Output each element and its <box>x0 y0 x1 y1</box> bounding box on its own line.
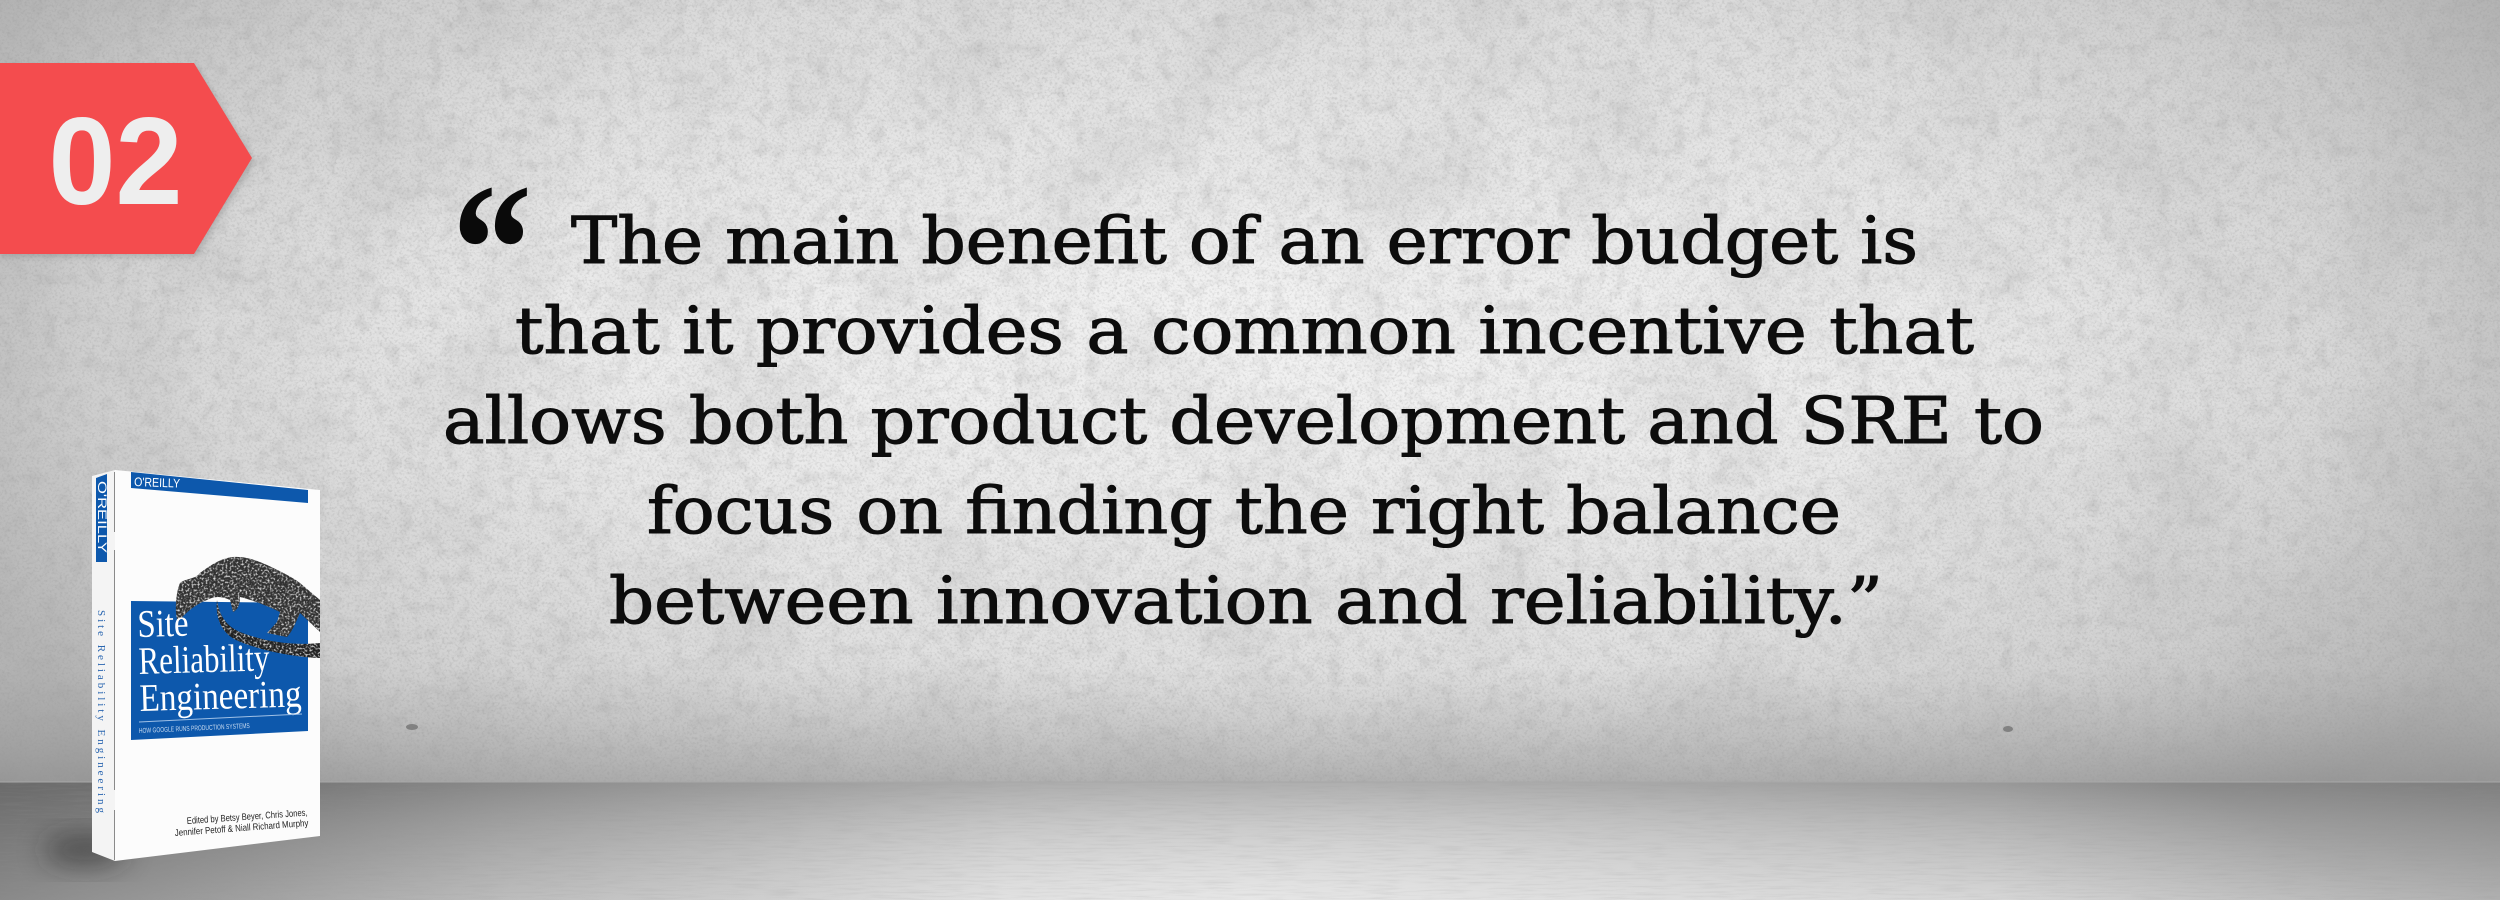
background: concrete floor <box>0 782 2500 900</box>
cover title: Engineering <box>139 672 302 720</box>
quote text: allows both product development and SRE to <box>443 384 2044 459</box>
lizard illustration <box>176 557 320 658</box>
badge number: 02 <box>48 93 182 231</box>
cover editors: Jennifer Petoff & Niall Richard Murphy <box>174 818 309 839</box>
cover title <box>137 599 302 720</box>
quote text: focus on finding the right balance <box>647 474 1841 549</box>
book: Site Reliability Engineering <box>43 470 320 866</box>
book spine: Site Reliability Engineering <box>95 610 107 814</box>
quote mark: “ <box>452 145 532 353</box>
number badge <box>0 63 255 257</box>
cover top band: O'REILLY <box>134 475 181 491</box>
book shadow <box>43 834 127 866</box>
cover editors: Edited by Betsy Beyer, Chris Jones, <box>186 808 308 827</box>
book spine: O'REILLY <box>95 481 107 553</box>
book front cover <box>115 470 320 861</box>
cover subtitle: HOW GOOGLE RUNS PRODUCTION SYSTEMS <box>139 723 250 735</box>
cover title: Reliability <box>138 636 270 683</box>
cover editors <box>174 808 309 839</box>
quote text: The main benefit of an error budget is <box>571 204 1918 279</box>
quote text: between innovation and reliability.” <box>609 564 1883 639</box>
cover title block <box>131 601 308 740</box>
quote text <box>443 204 2044 639</box>
cover title: Site <box>137 602 189 646</box>
cover top band <box>131 472 308 503</box>
quote text: that it provides a common incentive that <box>515 294 1974 369</box>
book spine <box>92 470 115 861</box>
